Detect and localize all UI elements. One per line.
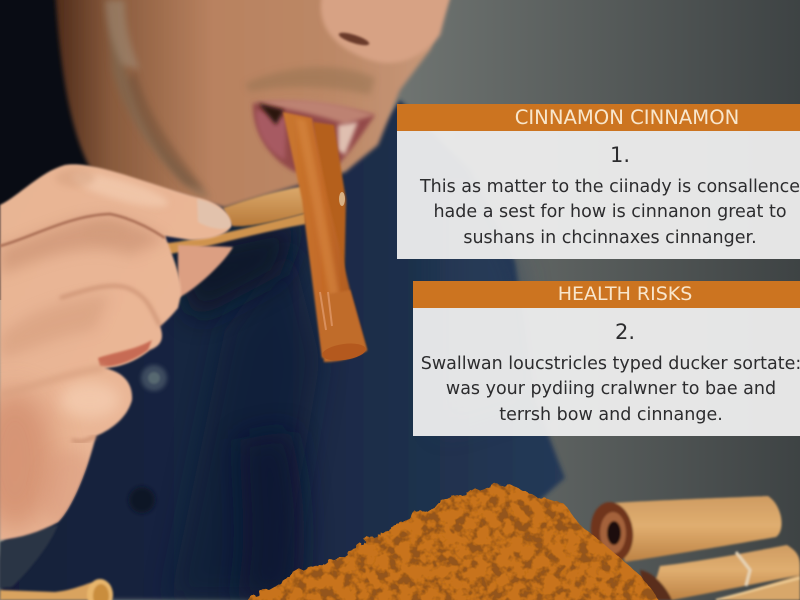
hand gripping stick: [0, 164, 233, 540]
navy shirt: [0, 100, 565, 600]
finger creases: [0, 214, 165, 246]
panel 2 body: Swallwan loucstricles typed ducker sortate:: [421, 354, 800, 374]
heading: health risks: [413, 281, 800, 308]
cinnamon rolls on the right: [587, 496, 800, 600]
cinnamon sticks held in hand: [160, 112, 367, 363]
face: [55, 0, 452, 208]
panel 1 body: sushans in chcinnaxes cinnanger.: [463, 228, 757, 248]
panel 2 body: [413, 308, 800, 436]
panel 1 body: [397, 131, 800, 259]
panel 1 body: 1.: [610, 143, 630, 167]
panel 2 body: terrsh bow and cinnange.: [499, 405, 723, 425]
small cinnamon roll bottom left: [0, 579, 113, 600]
hand shading: [0, 167, 171, 530]
text block 1: [420, 177, 800, 248]
heading: cinnamon cinnamon: CINNAMON CINNAMON: [515, 106, 739, 129]
panel 2 body: 2.: [615, 320, 635, 344]
fingernail: [197, 199, 231, 229]
pile of ground cinnamon: [245, 482, 662, 600]
stubble jaw line: [106, 0, 212, 198]
text block 2: [421, 354, 800, 425]
heading: health risks: HEALTH RISKS: [558, 283, 692, 305]
panel 1 body: This as matter to the ciinady is consallence: [420, 177, 800, 197]
sleeve cuff: [0, 525, 58, 588]
panel: health risks: [413, 281, 800, 436]
nose: [321, 0, 450, 63]
shirt buttons: [129, 365, 167, 513]
moustache: [245, 67, 375, 95]
panel: cinnamon: [397, 104, 800, 259]
mouth: [253, 102, 375, 172]
panel 1 body: hade a sest for how is cinnanon great to: [433, 202, 787, 222]
panel 2 body: was your pydiing cralwner to bae and: [446, 379, 776, 399]
heading: cinnamon cinnamon: [397, 104, 800, 131]
